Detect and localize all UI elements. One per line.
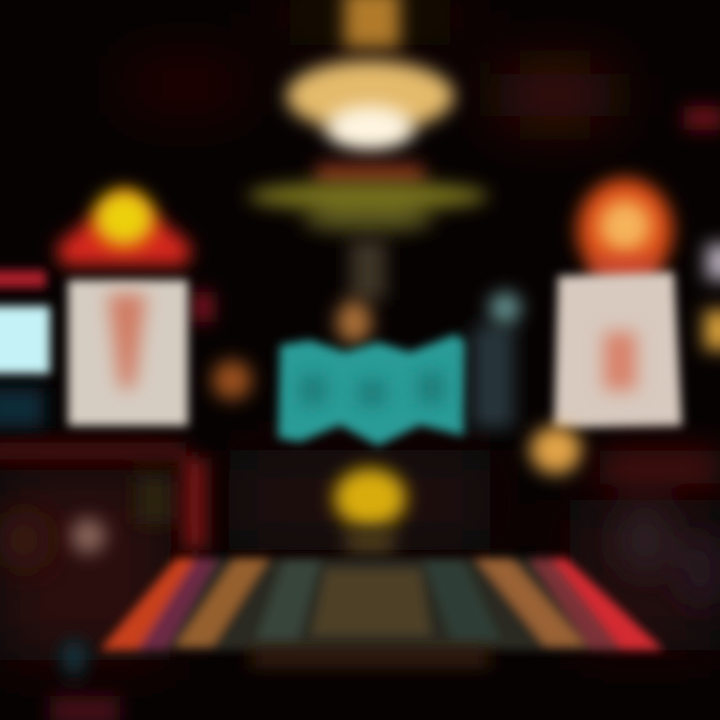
striped floor table [100, 558, 664, 650]
grey-blue right display [472, 292, 521, 428]
right lamp top [577, 178, 673, 282]
central column [336, 240, 386, 344]
left small white light [0, 510, 106, 570]
left shelf [0, 442, 206, 550]
left wall sign [0, 270, 50, 428]
glowing gold lamp [530, 426, 582, 474]
left lamp top [56, 190, 212, 322]
yellow center orb [334, 468, 406, 554]
right lower shelf [600, 450, 720, 606]
olive tiered canopy [248, 181, 488, 233]
chandelier [286, 0, 454, 186]
right white panel [554, 272, 682, 428]
teal central display [278, 334, 466, 446]
left white panel [68, 280, 188, 426]
right edge lights [684, 106, 720, 350]
small orange light [212, 360, 252, 400]
floor front edge [50, 640, 490, 720]
